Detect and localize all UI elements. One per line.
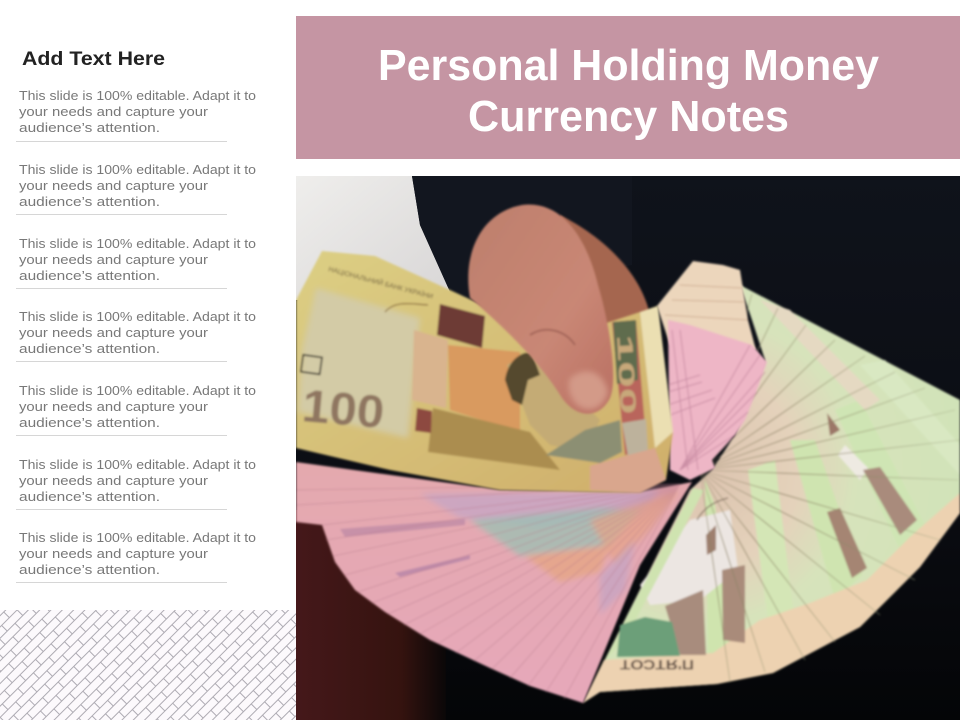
text block 4 <box>16 310 256 362</box>
text block 2: This slide is 100% editable. Adapt it to <box>19 163 256 177</box>
text block 2: audience’s attention. <box>19 195 160 209</box>
panel: text list <box>16 49 256 583</box>
text block 6 <box>16 458 256 510</box>
photo: hand holding fanned currency notes <box>296 176 960 720</box>
upper pink notes fan <box>668 320 767 480</box>
pale green diagonal strip <box>610 488 704 652</box>
white patch <box>640 510 738 605</box>
brown engraved marks <box>863 467 917 535</box>
text block 3 <box>16 237 256 289</box>
heading: Add Text Here: Add Text Here <box>22 49 165 70</box>
outlined square mark <box>301 355 322 374</box>
text block 6: This slide is 100% editable. Adapt it to <box>19 458 256 472</box>
title <box>378 41 880 141</box>
text block 4: your needs and capture your <box>19 326 208 340</box>
fingers behind the notes <box>560 215 650 335</box>
right strip of note <box>612 320 647 455</box>
pale watermark panel <box>298 288 420 438</box>
text block 4: This slide is 100% editable. Adapt it to <box>19 310 256 324</box>
title banner <box>296 16 960 159</box>
title: Personal Holding Money <box>378 41 880 90</box>
photo background <box>296 176 960 720</box>
tan edge band <box>583 493 960 703</box>
text block 7: your needs and capture your <box>19 547 208 561</box>
text block 5: your needs and capture your <box>19 400 208 414</box>
text block 1: your needs and capture your <box>19 105 208 119</box>
text block 3: This slide is 100% editable. Adapt it to <box>19 237 256 251</box>
decorative brick pattern panel <box>0 610 296 720</box>
text block 6: your needs and capture your <box>19 474 208 488</box>
note edge lines <box>700 294 960 682</box>
denomination 100: 100 <box>300 379 386 438</box>
text block 7 <box>16 531 256 583</box>
text block 1: audience’s attention. <box>19 121 160 135</box>
text block 5 <box>16 384 256 436</box>
pale banknote strips <box>704 482 728 652</box>
lower pink notes fan <box>296 462 692 703</box>
portrait <box>507 363 599 446</box>
text block 3: your needs and capture your <box>19 253 208 267</box>
text block 5: audience’s attention. <box>19 416 160 430</box>
pink border of note <box>590 448 666 493</box>
peach columns <box>412 330 448 408</box>
green seal on note <box>617 617 680 657</box>
thumb holding the notes <box>468 205 613 414</box>
upper cream notes fan <box>657 261 756 350</box>
text block 4: audience’s attention. <box>19 342 160 356</box>
vertical denomination 100: 100 <box>612 334 641 415</box>
yellow hundred hryvnia note <box>296 251 673 493</box>
text block 2: your needs and capture your <box>19 179 208 193</box>
text block 6: audience’s attention. <box>19 490 160 504</box>
title: Currency Notes <box>468 92 789 141</box>
text block 1 <box>16 89 256 142</box>
green and tan notes fan <box>583 285 960 703</box>
yellow hundred hryvnia note: НАЦІОНАЛЬНИЙ БАНК УКРАЇНИ <box>327 264 434 301</box>
text block 7: audience’s attention. <box>19 563 160 577</box>
upside-down denomination text: П'ЯТСОТ <box>619 657 694 673</box>
signature and lettering <box>385 304 428 312</box>
text block 5: This slide is 100% editable. Adapt it to <box>19 384 256 398</box>
text block 1: This slide is 100% editable. Adapt it to <box>19 89 256 103</box>
note edge lines <box>480 482 680 700</box>
orange print area <box>448 345 520 432</box>
red seal <box>437 304 485 348</box>
text block 2 <box>16 163 256 215</box>
text block 7: This slide is 100% editable. Adapt it to <box>19 531 256 545</box>
text block 3: audience’s attention. <box>19 269 160 283</box>
printed text area <box>428 408 560 470</box>
